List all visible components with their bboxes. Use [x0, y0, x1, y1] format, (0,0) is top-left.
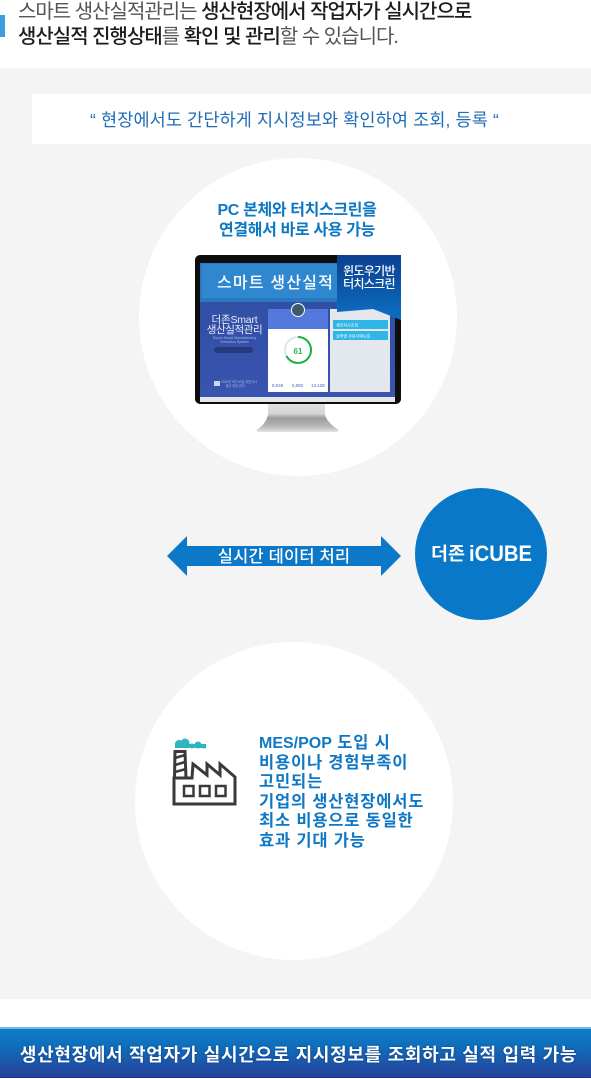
header accent bar: [0, 15, 5, 37]
screen left text: Duzon Smart Manufacturing: [213, 336, 256, 340]
logo circle: 더존 iCUBE: 더존: [431, 544, 465, 564]
screen left text: 생산 현장 관리: [225, 383, 245, 388]
heading text: 생산실적 진행상태를 확인 및 관리할 수 있습니다.: [18, 26, 398, 48]
screen left text: 더존Smart: [212, 314, 258, 326]
app card: 13,128: [311, 383, 325, 388]
app card: 61: [294, 347, 303, 356]
title band: 스마트 생산실적: [217, 274, 334, 292]
heading text: 스마트 생산실적관리는 생산현장에서 작업자가 실시간으로: [18, 1, 471, 23]
monitor stand: [256, 404, 339, 432]
arrow label: 실시간 데이터 처리: [218, 548, 350, 566]
app card: 8,046: [272, 383, 284, 388]
app card: [268, 304, 328, 392]
icon: factory: [172, 738, 236, 806]
title band: [200, 263, 337, 302]
logo circle: 더존 iCUBE: [415, 488, 547, 620]
factory body: [174, 752, 235, 804]
upper circle text: [217, 202, 377, 238]
heading text: [18, 1, 472, 48]
lower circle text: MES/POP 도입 시: [259, 734, 391, 752]
icon: monitor with touch screen app: [195, 255, 401, 432]
app side panel: [330, 309, 390, 392]
lower circle text: 효과 기대 가능: [259, 832, 366, 850]
footer banner: [0, 1027, 591, 1078]
panel: lower circle: [135, 642, 453, 960]
upper circle text: 연결해서 바로 사용 가능: [219, 222, 375, 238]
ribbon label: [337, 255, 401, 320]
lower circle text: 최소 비용으로 동일한: [259, 812, 414, 830]
arrow: real-time data processing: [167, 536, 401, 576]
footer banner: 생산현장에서 작업자가 실시간으로 지시정보를 조회하고 실적 입력 가능: [20, 1045, 577, 1065]
app side panel: 생산지시조회: [336, 322, 358, 328]
logo circle: 더존 iCUBE: iCUBE: [469, 541, 532, 566]
lower circle text: [259, 734, 424, 850]
ribbon label: 터치스크린: [343, 277, 395, 291]
screen left text: Execution System: [220, 340, 249, 344]
cloud: [175, 738, 206, 748]
screen left text: [207, 314, 262, 388]
screen background: [200, 263, 395, 397]
monitor body: [195, 255, 401, 404]
app side panel: 실적별 사용자매뉴얼: [336, 332, 371, 338]
ribbon label: 윈도우기반: [343, 264, 396, 278]
app card: 5,082: [292, 383, 304, 388]
lower circle text: 고민되는: [259, 773, 323, 791]
quote text: “ 현장에서도 간단하게 지시정보와 확인하여 조회, 등록 “: [90, 110, 499, 130]
lower circle text: 기업의 생산현장에서도: [259, 792, 424, 810]
panel: upper circle: [139, 158, 457, 476]
screen left text: 2019년 9월 20일 대표이사: [221, 379, 257, 384]
quote banner: [32, 94, 591, 144]
upper circle text: PC 본체와 터치스크린을: [217, 202, 377, 219]
screen left text: 생산실적관리: [207, 324, 262, 336]
lower circle text: 비용이나 경험부족이: [259, 754, 408, 772]
